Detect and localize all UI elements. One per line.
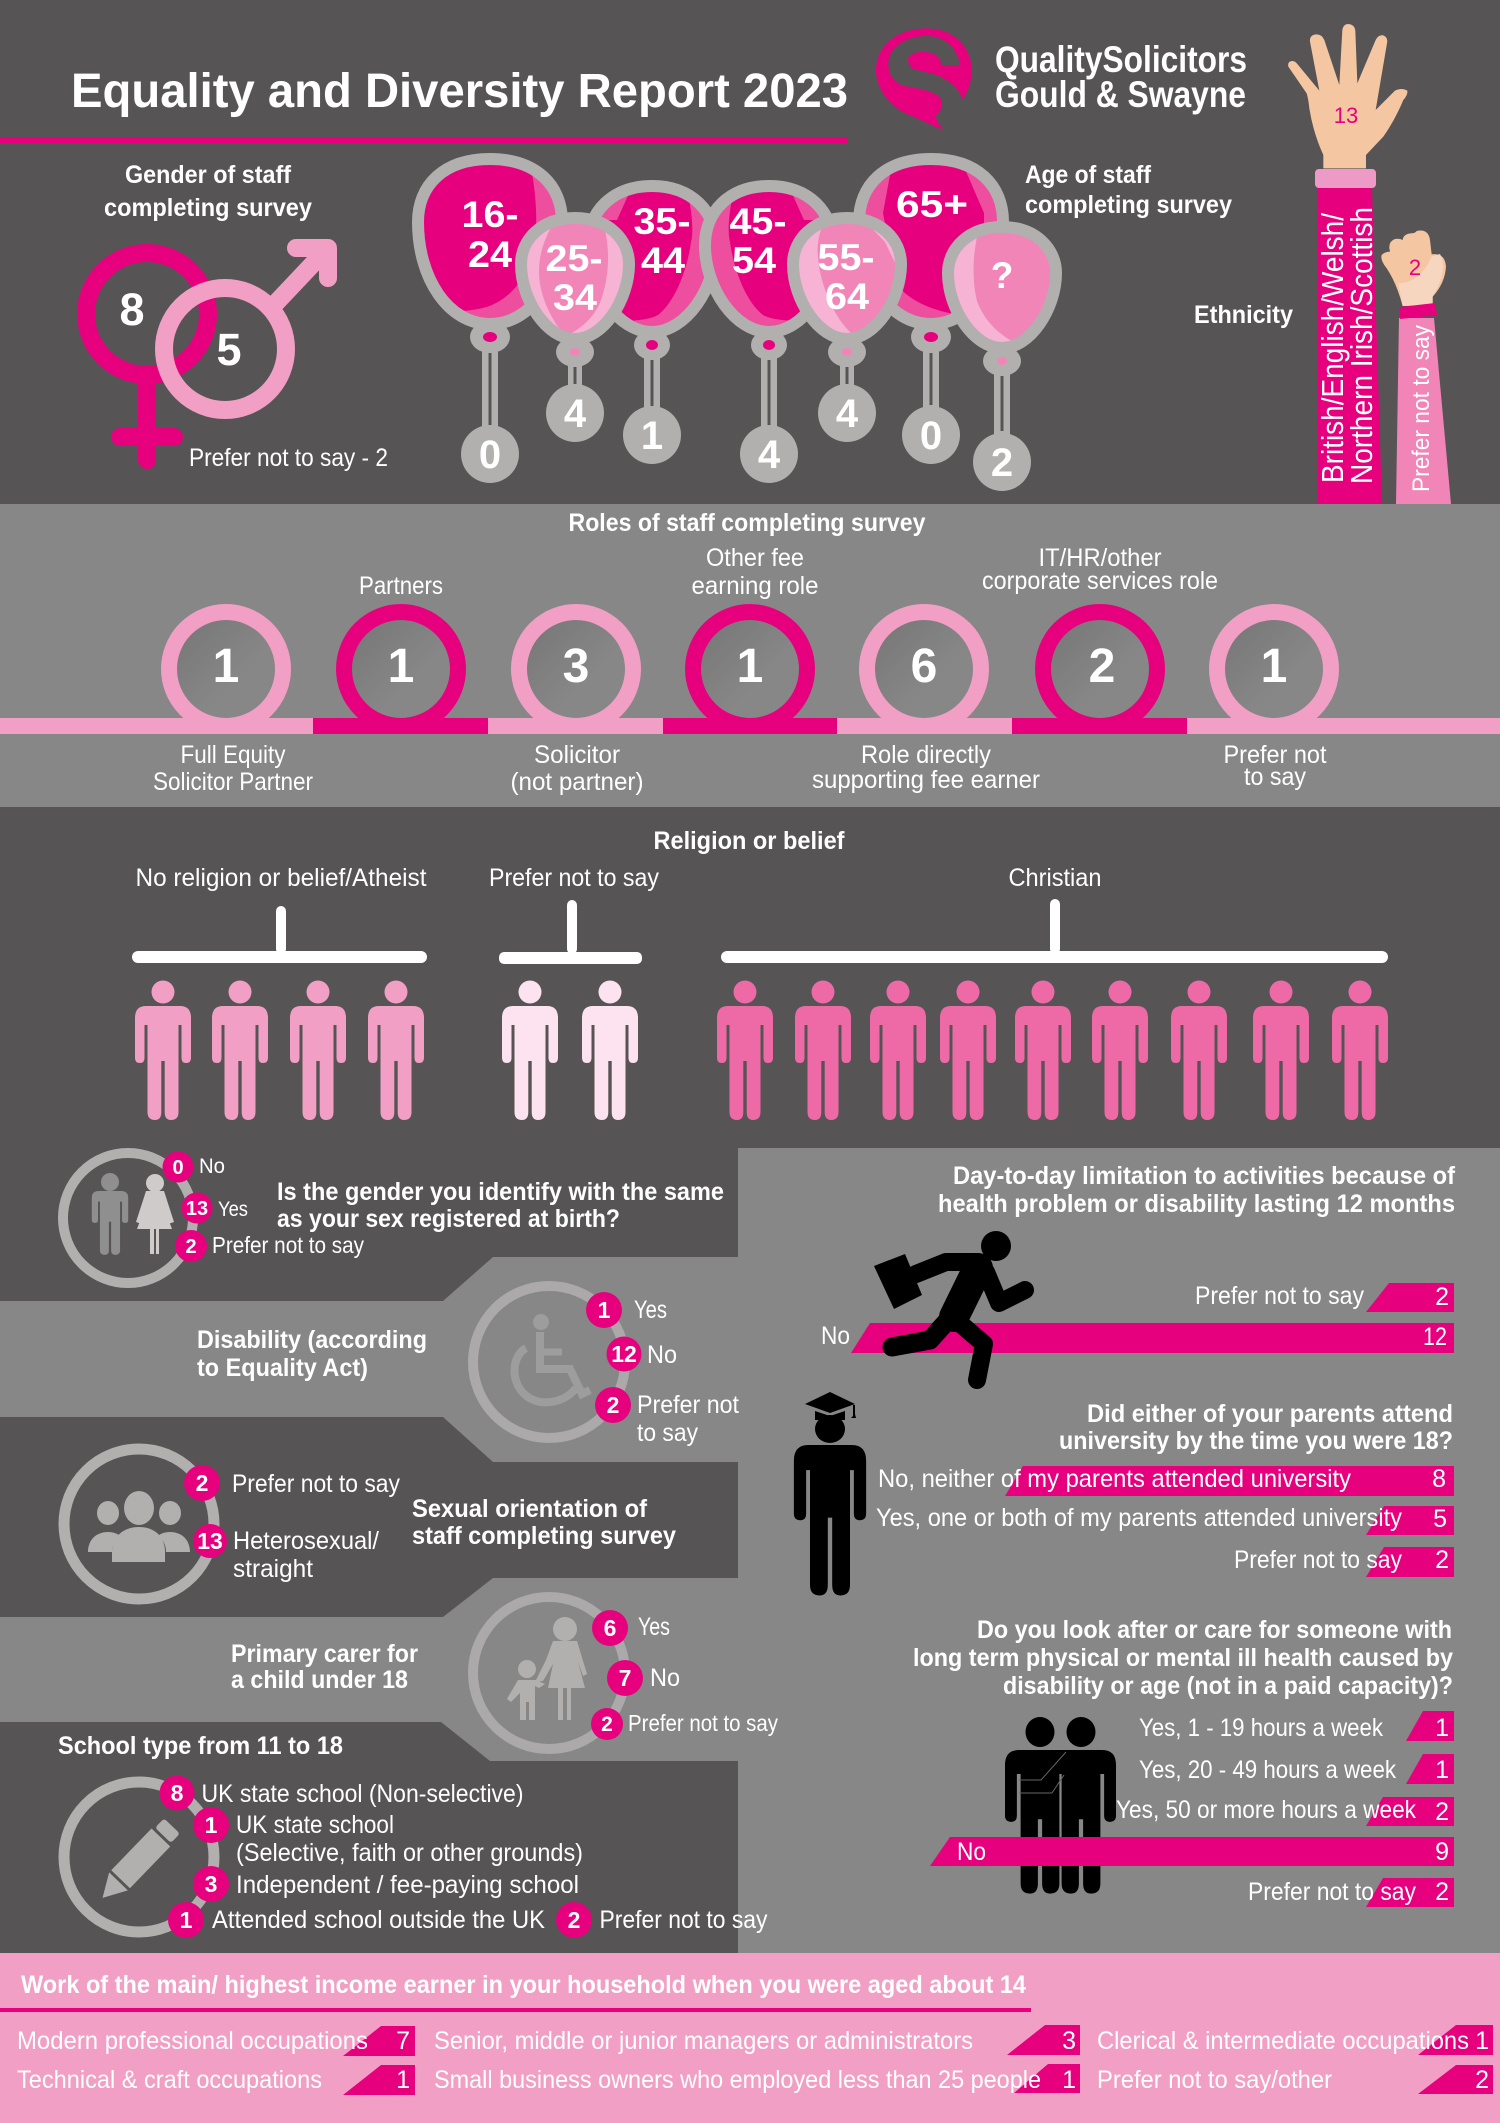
panel: gender identity	[63, 1152, 724, 1283]
answer: no: No	[650, 1664, 680, 1692]
heading: parents: university by the time you were 18?	[1059, 1427, 1453, 1455]
answer: prefer not to say: 2	[185, 1236, 197, 1258]
row: prefer not to say: Prefer not to say/other	[1097, 2066, 1332, 2094]
icon: raised fist	[1381, 230, 1446, 306]
heading: limitation: health problem or disability lasting 12 months	[938, 1190, 1455, 1218]
answer: no: No	[647, 1341, 677, 1369]
answer: yes: Yes	[634, 1296, 667, 1324]
panel: household income earner	[0, 1953, 1500, 2123]
logo: Gould & Swayne	[995, 74, 1246, 115]
icon: running person with briefcase	[874, 1231, 1025, 1380]
labels above rings: Partners	[359, 572, 443, 600]
icon: ring with adult and child	[473, 1597, 625, 1749]
panel: religion or belief	[132, 827, 1388, 1120]
balloon: 45-54	[705, 180, 839, 483]
labels above rings: earning role	[692, 572, 818, 600]
bar: no: No	[821, 1322, 850, 1350]
heading: caring: disability or age (not in a paid capacity)?	[1003, 1672, 1453, 1700]
answer: heterosexual: straight	[233, 1555, 313, 1583]
bar: prefer not to say: 2	[1435, 1546, 1449, 1574]
answer: yes: Yes	[638, 1613, 670, 1641]
heading: disability	[197, 1326, 427, 1382]
group: no religion	[132, 864, 427, 1120]
group: christian: Christian	[1008, 864, 1102, 892]
balloon: unknown age: 2	[991, 441, 1013, 485]
icon: raised fist: 2	[1409, 255, 1421, 280]
heading: caring: Do you look after or care for someone with	[977, 1616, 1452, 1644]
bar: 20-49 hours: Yes, 20 - 49 hours a week	[1139, 1756, 1396, 1784]
bar: prefer not to say: Prefer not to say	[1248, 1878, 1416, 1906]
answer: prefer not to say	[175, 1230, 364, 1262]
answer: outside the UK	[168, 1902, 545, 1938]
bar: neither parent: No, neither of my parents attended university	[878, 1465, 1351, 1493]
rings with counts: 1	[388, 640, 414, 693]
heading: roles: Roles of staff completing survey	[568, 509, 926, 537]
logo: QualitySolicitors	[995, 39, 1247, 80]
bar: 20-49 hours: 1	[1435, 1756, 1449, 1784]
bar: prefer not to say: 2	[1435, 1878, 1449, 1906]
answer: no	[607, 1660, 680, 1696]
labels below rings: supporting fee earner	[812, 766, 1040, 794]
answer: non-selective: 8	[171, 1780, 184, 1806]
labels above rings: Other fee	[706, 544, 804, 572]
title: Equality and Diversity Report 2023	[71, 65, 848, 118]
row: small business owners: 1	[1062, 2066, 1076, 2094]
answer: prefer not to say	[184, 1465, 400, 1501]
bar: 1-19 hours: 1	[1435, 1714, 1449, 1742]
heading: parents: Did either of your parents attend	[1087, 1400, 1453, 1428]
heading: age: completing survey	[1025, 191, 1232, 219]
answer: independent	[193, 1866, 579, 1902]
balloon: 45-54: 54	[732, 240, 776, 281]
icon: ring with group of people	[64, 1449, 214, 1599]
labels above rings: IT/HR/other	[1038, 544, 1162, 572]
bar: 50 or more hours: 2	[1435, 1798, 1449, 1826]
bar: 50 or more hours: Yes, 50 or more hours a week	[1116, 1796, 1416, 1824]
ribbon band	[0, 718, 1500, 734]
panel: caring responsibilities	[913, 1616, 1454, 1907]
answer: heterosexual	[193, 1524, 379, 1583]
row: technical and craft: Technical & craft occupations	[17, 2066, 322, 2094]
labels below rings: Solicitor Partner	[153, 768, 313, 796]
bar: 1-19 hours: Yes, 1 - 19 hours a week	[1139, 1714, 1383, 1742]
bar: prefer not to say: 2	[1435, 1283, 1449, 1311]
rings with counts	[169, 612, 1331, 726]
balloon: 65+: 0	[920, 414, 942, 458]
panel: ethnicity	[1194, 24, 1451, 504]
bar: neither parent: 8	[1432, 1465, 1446, 1493]
row: clerical: Clerical & intermediate occupations	[1097, 2027, 1469, 2055]
balloon: 45-54: 4	[758, 433, 781, 477]
icon: two people embracing	[1005, 1717, 1116, 1894]
answer: non-selective: UK state school (Non-selective)	[202, 1780, 524, 1808]
panel: parents at university	[794, 1392, 1454, 1595]
heading: school type: School type from 11 to 18	[58, 1732, 343, 1760]
labels below rings: (not partner)	[510, 768, 644, 796]
balloon: 65+	[859, 153, 1003, 464]
balloon: 16-24: 24	[468, 234, 512, 275]
heading: religion: Religion or belief	[654, 827, 845, 855]
row: technical and craft: 1	[396, 2066, 410, 2094]
answer: no: 12	[611, 1341, 637, 1367]
balloon: 16-24	[390, 153, 562, 483]
labels below rings	[153, 741, 1327, 796]
answer: outside the UK: Attended school outside the UK	[212, 1906, 545, 1934]
answer: no	[162, 1152, 225, 1182]
answer: yes	[586, 1292, 667, 1328]
arm: British count: British/English/Welsh/	[1315, 213, 1350, 483]
heading: caring	[913, 1616, 1453, 1700]
heading: primary carer: Primary carer for	[231, 1640, 418, 1668]
panel: day-to-day limitation	[821, 1162, 1456, 1380]
heading: limitation: Day-to-day limitation to activities because of	[953, 1162, 1456, 1190]
answer: yes: 1	[598, 1297, 611, 1323]
answer: independent: 3	[205, 1871, 217, 1897]
labels below rings: Solicitor	[534, 741, 620, 769]
answer: prefer not to say: Prefer not to say	[232, 1470, 400, 1498]
balloon: 35-44: 44	[641, 240, 685, 281]
balloon: 25-34: 34	[553, 277, 597, 318]
heading: gender: completing survey	[104, 194, 312, 222]
balloon: 16-24: 0	[479, 433, 501, 477]
answer: prefer not to say: Prefer not to say	[628, 1710, 778, 1736]
answer: yes	[592, 1610, 670, 1646]
answer: prefer not to say: 2	[568, 1907, 580, 1933]
labels below rings: to say	[1244, 763, 1306, 791]
answer: non-selective	[160, 1776, 524, 1810]
heading: caring: long term physical or mental ill health caused by	[913, 1644, 1453, 1672]
answer: prefer not to say: Prefer not to say	[600, 1906, 768, 1934]
row: clerical: 1	[1475, 2027, 1489, 2055]
icon: raised open hand	[1288, 24, 1407, 168]
heading: sexual orientation: staff completing survey	[412, 1522, 676, 1550]
answer: heterosexual: Heterosexual/	[233, 1527, 379, 1555]
answer: no: 0	[172, 1157, 184, 1179]
arm: prefer not to say	[1396, 303, 1451, 504]
row: small business owners: Small business owners who employed less than 25 people	[434, 2066, 1041, 2094]
heading: sexual orientation: Sexual orientation of	[412, 1495, 648, 1523]
panel: primary carer	[231, 1597, 778, 1749]
balloon: 35-44: 1	[641, 414, 663, 458]
balloon: 55-64: 4	[836, 392, 859, 436]
text: prefer not to say: Prefer not to say - 2	[189, 444, 388, 472]
panel: gender of staff	[86, 161, 388, 472]
group: no religion: No religion or belief/Atheist	[136, 864, 427, 892]
balloon: 25-34	[521, 217, 629, 442]
heading: age	[1025, 161, 1232, 219]
heading: parents	[1059, 1400, 1453, 1455]
heading: household income earner: Work of the main/ highest income earner in your household when you were aged about 14	[21, 1971, 1026, 1999]
panel: disability	[197, 1286, 739, 1447]
row: modern professional: Modern professional occupations	[17, 2027, 368, 2055]
labels below rings: Prefer not	[1224, 741, 1327, 769]
balloon: 35-44	[582, 180, 716, 464]
bar: one or both parents: 5	[1433, 1505, 1447, 1533]
heading: limitation	[938, 1162, 1456, 1218]
balloon: 55-64	[793, 217, 901, 442]
group: christian	[717, 864, 1388, 1120]
bar: no: 12	[1423, 1323, 1447, 1351]
rings with counts: 2	[1089, 640, 1115, 693]
icon: male symbol	[164, 248, 328, 410]
answer: selective	[193, 1807, 583, 1867]
balloon: unknown age: ?	[991, 255, 1013, 296]
answer: prefer not to say	[595, 1387, 739, 1447]
row: modern professional: 7	[396, 2027, 410, 2055]
heading: ethnicity: Ethnicity	[1194, 301, 1293, 329]
answer: independent: Independent / fee-paying school	[236, 1871, 579, 1899]
icon: ring with pencil	[64, 1782, 214, 1932]
answer: selective: 1	[205, 1812, 218, 1838]
arm: British count: Northern Irish/Scottish	[1344, 207, 1379, 484]
panel: age balloons	[390, 153, 1232, 491]
heading: gender	[104, 161, 312, 222]
answer: yes: 13	[186, 1198, 208, 1220]
labels above rings: corporate services role	[982, 567, 1218, 595]
balloon: 25-34: 25-	[546, 238, 602, 279]
heading: gender identity	[277, 1178, 724, 1233]
answer: prefer not to say: to say	[637, 1419, 698, 1447]
heading: primary carer	[231, 1640, 418, 1694]
heading: gender identity: as your sex registered at birth?	[277, 1205, 620, 1233]
heading: sexual orientation	[412, 1495, 676, 1550]
rings with counts: 1	[1261, 640, 1287, 693]
bar: prefer not to say: Prefer not to say	[1195, 1282, 1364, 1310]
panel: sexual orientation	[64, 1449, 676, 1599]
balloon: 55-64: 55-	[818, 237, 874, 278]
panel: school type	[58, 1732, 768, 1938]
balloon: 65+: 65+	[896, 184, 968, 225]
value: male count: 5	[216, 324, 242, 375]
answer: selective: UK state school	[236, 1811, 394, 1839]
heading: gender: Gender of staff	[125, 161, 292, 189]
arm: prefer not to say: Prefer not to say	[1408, 325, 1435, 492]
balloon: 16-24: 16-	[462, 194, 518, 235]
rings with counts: 6	[911, 640, 937, 693]
row: prefer not to say	[1097, 2065, 1493, 2094]
heading: gender identity: Is the gender you identify with the same	[277, 1178, 724, 1206]
labels below rings: Role directly	[861, 741, 991, 769]
answer: prefer not to say: 2	[601, 1713, 613, 1736]
heading: age: Age of staff	[1025, 161, 1152, 189]
answer: heterosexual: 13	[197, 1528, 223, 1554]
bar: no	[930, 1837, 1454, 1866]
icon: raised open hand: 13	[1334, 103, 1358, 128]
labels above rings	[359, 544, 1218, 600]
arm: British count	[1315, 169, 1382, 504]
group: prefer not to say: Prefer not to say	[489, 864, 659, 892]
panel: roles of staff	[0, 504, 1500, 807]
heading: disability: to Equality Act)	[197, 1354, 368, 1382]
answer: prefer not to say: Prefer not to say	[212, 1232, 364, 1258]
answer: prefer not to say	[556, 1902, 768, 1938]
grey stepped background for the lower section	[0, 1148, 1500, 1953]
answer: selective: (Selective, faith or other grounds)	[236, 1839, 583, 1867]
heading: disability: Disability (according	[197, 1326, 427, 1354]
balloon: 35-44: 35-	[634, 201, 690, 242]
group: prefer not to say	[489, 864, 659, 1120]
labels below rings: Full Equity	[180, 741, 286, 769]
answer: outside the UK: 1	[180, 1907, 193, 1933]
icon: female symbol	[86, 253, 208, 460]
answer: yes	[182, 1192, 248, 1224]
answer: prefer not to say	[591, 1708, 778, 1740]
row: senior managers: Senior, middle or junior managers or administrators	[434, 2027, 973, 2055]
rings with counts: 1	[737, 640, 763, 693]
answer: yes: 6	[604, 1615, 616, 1641]
answer: no: 7	[619, 1665, 631, 1691]
heading: primary carer: a child under 18	[231, 1666, 408, 1694]
rings with counts: 3	[563, 640, 589, 693]
answer: no: No	[199, 1155, 225, 1178]
title underline	[0, 137, 848, 143]
answer: prefer not to say: 2	[607, 1392, 619, 1418]
bar: prefer not to say	[1195, 1282, 1454, 1312]
answer: prefer not to say: 2	[196, 1470, 208, 1496]
icon: ring with wheelchair	[473, 1286, 625, 1438]
balloon: 55-64: 64	[825, 276, 869, 317]
icon: ring with man and woman	[63, 1153, 193, 1283]
answer: yes: Yes	[218, 1198, 248, 1221]
balloon: 25-34: 4	[564, 392, 587, 436]
rings with counts: 1	[213, 640, 239, 693]
row: prefer not to say: 2	[1475, 2066, 1489, 2094]
balloon: 45-54: 45-	[730, 201, 786, 242]
answer: no	[606, 1336, 677, 1372]
heading underline	[0, 2008, 1031, 2012]
icon: graduate	[794, 1392, 866, 1595]
bar: no: No	[957, 1838, 986, 1866]
bar: no	[821, 1322, 1454, 1353]
value: female count: 8	[119, 284, 145, 335]
logo	[876, 28, 1247, 130]
row: senior managers: 3	[1062, 2027, 1076, 2055]
bar: one or both parents: Yes, one or both of my parents attended university	[876, 1504, 1402, 1532]
bar: prefer not to say: Prefer not to say	[1234, 1546, 1402, 1574]
answer: prefer not to say: Prefer not	[637, 1391, 739, 1419]
bar: no: 9	[1435, 1838, 1449, 1866]
balloon: unknown age	[948, 221, 1062, 491]
